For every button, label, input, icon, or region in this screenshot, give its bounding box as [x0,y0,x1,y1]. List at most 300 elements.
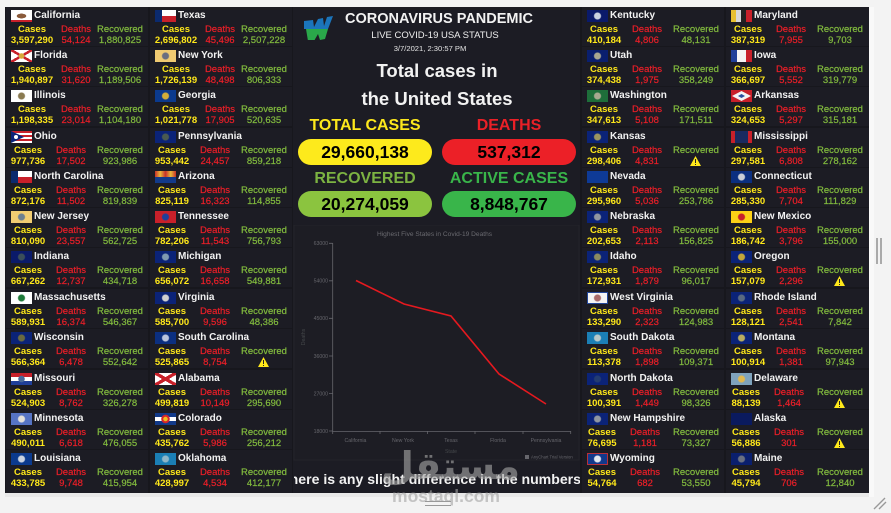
card: Montana: 1,381 [779,357,803,368]
card: Missouri: Missouri [34,373,75,384]
card: New York: Deaths [205,64,235,75]
card: Louisiana: 9,748 [59,478,83,489]
card: North Carolina: 11,502 [57,196,85,207]
card: North Carolina: Cases [14,185,42,196]
card: Pennsylvania [150,128,292,167]
card: Montana: 100,914 [731,357,765,368]
card: California: Cases [18,24,46,35]
card: North Dakota: Recovered [673,387,719,398]
card: Wyoming: Cases [588,467,616,478]
card: Texas: Texas [178,10,206,21]
card: Ohio: Cases [14,145,42,156]
card: Nebraska: 2,113 [635,236,659,247]
card: New Jersey: 23,557 [56,236,86,247]
card: Tennessee: 11,543 [201,236,229,247]
card: Kentucky [582,7,724,46]
card: Massachusetts: 589,931 [11,317,45,328]
card: Pennsylvania: Recovered [241,145,287,156]
card: Arkansas [726,87,869,126]
card: Oregon: Recovered [817,265,863,276]
card: Florida: Florida [34,50,67,61]
card: Maryland: Deaths [776,24,806,35]
card: Oklahoma: Oklahoma [178,453,226,464]
card: Minnesota: Recovered [97,427,143,438]
card: Maine [726,450,869,493]
card: New York: 48,498 [205,75,235,86]
card: New Hampshire: 73,327 [681,438,711,449]
card: West Virginia: Cases [590,306,618,317]
card: Kentucky: Cases [590,24,618,35]
card: Colorado: Colorado [178,413,222,424]
card: Nevada [582,168,724,207]
card: Arizona: Arizona [178,171,215,182]
card: New Jersey: 562,725 [103,236,137,247]
recovered value [298,191,432,217]
card: New Jersey: Deaths [56,225,86,236]
card: South Dakota: 1,898 [635,357,659,368]
card: Connecticut [726,168,869,207]
card: North Dakota: 1,449 [635,398,659,409]
card: Utah: Utah [610,50,632,61]
card: Indiana: Deaths [56,265,86,276]
card: Wyoming: Wyoming [610,453,655,464]
card: Washington: 5,108 [635,115,659,126]
card: Rhode Island: Recovered [817,306,863,317]
card: Delaware [726,370,869,409]
card: South Dakota: Recovered [673,346,719,357]
card: New York: Cases [162,64,190,75]
card: Nevada: 5,036 [635,196,659,207]
card: Iowa: Cases [734,64,762,75]
card: Wisconsin: Recovered [97,346,143,357]
card: Connecticut: 111,829 [824,196,856,207]
card: Arkansas: 315,181 [823,115,857,126]
card: Idaho: Cases [590,265,618,276]
card: California: Deaths [61,24,91,35]
title: CORONAVIRUS PANDEMIC [345,11,533,27]
card: Georgia: Cases [162,104,190,115]
card: Florida: Deaths [61,64,91,75]
card: Utah: 1,975 [635,75,659,86]
card: Pennsylvania: 24,457 [200,156,230,167]
card: Texas: Deaths [205,24,235,35]
card: North Dakota: Cases [590,387,618,398]
card: Illinois: 1,198,335 [11,115,53,126]
card: New Mexico: 3,796 [779,236,803,247]
card: Kansas: Recovered [673,145,719,156]
card: Tennessee: Recovered [241,225,287,236]
card: Tennessee: Tennessee [178,211,229,222]
card: Alabama [150,370,292,409]
card: Colorado: Deaths [200,427,230,438]
card: New Mexico: 155,000 [823,236,857,247]
card: Mississippi: Deaths [776,145,806,156]
card: Oregon: Oregon [754,251,790,262]
card: Mississippi: Recovered [817,145,863,156]
card: Georgia: 17,905 [205,115,235,126]
card: Pennsylvania: 953,442 [155,156,189,167]
line chart: highest five states in deaths: 36000 [314,354,328,360]
card: Georgia: 520,635 [247,115,281,126]
card: North Carolina: Recovered [97,185,143,196]
card: Alaska [726,410,869,449]
card: Tennessee: Cases [158,225,186,236]
card: Alaska: Deaths [774,427,804,438]
card: Maine: Deaths [774,467,804,478]
card: Nevada: Nevada [610,171,646,182]
card: Montana: Recovered [817,346,863,357]
card: Ohio: Deaths [56,145,86,156]
card: Arizona: Recovered [241,185,287,196]
line chart: highest five states in deaths: Florida [490,438,506,444]
card: New Mexico: New Mexico [754,211,811,222]
card: Colorado: 256,212 [247,438,281,449]
card: California: California [34,10,80,21]
card: Missouri: Deaths [56,387,86,398]
card: Alaska: Recovered [817,427,863,438]
card: Alabama: 295,690 [247,398,281,409]
active cases label: ACTIVE CASES [450,170,568,187]
card: New Mexico: Recovered [817,225,863,236]
card: Washington: Washington [610,90,667,101]
card: Alabama: Recovered [241,387,287,398]
card: Oklahoma: Recovered [241,467,287,478]
card: Delaware: Delaware [754,373,798,384]
card: New Hampshire: 1,181 [633,438,657,449]
card: Utah [582,47,724,86]
card: Ohio [6,128,148,167]
card: Kansas: 298,406 [587,156,621,167]
card: Alabama: Deaths [200,387,230,398]
card: Illinois [6,87,148,126]
card: California: 1,880,825 [99,35,141,46]
card: New Mexico [726,208,869,247]
card: Kentucky: Deaths [632,24,662,35]
card: Alaska: Alaska [754,413,786,424]
card: Massachusetts: Cases [14,306,42,317]
card: Ohio: 977,736 [11,156,45,167]
card: Louisiana: Cases [14,467,42,478]
card: Georgia [150,87,292,126]
card: Kansas: Cases [590,145,618,156]
card: Arkansas: Cases [734,104,762,115]
icon: W logo [304,16,333,40]
card: Arizona: Deaths [200,185,230,196]
subtitle: LIVE COVID-19 USA STATUS [371,30,499,41]
watermark: mostaql: مستقل [381,444,520,488]
card: Florida: 31,620 [61,75,91,86]
card: Iowa [726,47,869,86]
card: Pennsylvania: Deaths [200,145,230,156]
card: Maryland: 387,319 [731,35,765,46]
card: West Virginia [582,289,724,328]
card: Arkansas: 324,653 [731,115,765,126]
card: Illinois: Recovered [97,104,143,115]
card: Maryland: 7,955 [779,35,803,46]
card: Utah: Cases [590,64,618,75]
card: Indiana: 667,262 [11,276,45,287]
card: Iowa: 5,552 [779,75,803,86]
card: Missouri: Recovered [97,387,143,398]
card: New York: Recovered [241,64,287,75]
card: Illinois: 1,104,180 [99,115,141,126]
total cases value: 29,660,138 [321,142,409,162]
card: Texas: 2,507,228 [243,35,285,46]
card: Georgia: Georgia [178,90,216,101]
watermark: mostaql: mostaql.com [392,486,500,506]
card: Wisconsin: Cases [14,346,42,357]
card: Washington: Recovered [673,104,719,115]
card: Mississippi: 278,162 [823,156,857,167]
card: New Jersey: Cases [14,225,42,236]
card: Utah: Recovered [673,64,719,75]
card: Virginia: Recovered [241,306,287,317]
line chart: highest five states in deaths: Texas [444,438,458,444]
card: Nebraska [582,208,724,247]
card: Maryland [726,7,869,46]
card: Massachusetts [6,289,148,328]
card: Arizona: Cases [158,185,186,196]
card: Iowa: 366,697 [731,75,765,86]
heading [361,60,513,109]
card: Oklahoma [150,450,292,493]
card: Florida: 1,940,897 [11,75,53,86]
card: West Virginia: Recovered [673,306,719,317]
card: Wyoming: Recovered [673,467,719,478]
card: New York [150,47,292,86]
card: Nebraska: 202,653 [587,236,621,247]
card: Michigan: Deaths [200,265,230,276]
card: South Carolina: 8,754 [203,357,227,368]
card: Ohio: Ohio [34,131,57,142]
card: South Carolina [150,329,292,368]
recovered label: RECOVERED [314,170,416,187]
active cases value [442,191,576,217]
card: Mississippi: 6,808 [779,156,803,167]
card: Washington: Cases [590,104,618,115]
card: Colorado: 5,986 [203,438,227,449]
card: New Hampshire: Recovered [673,427,719,438]
card: North Dakota: North Dakota [610,373,673,384]
card: Alabama: Cases [158,387,186,398]
card: Minnesota [6,410,148,449]
card: New Mexico: Cases [734,225,762,236]
card: Alabama: Alabama [178,373,220,384]
card: New Hampshire: New Hampshire [610,413,685,424]
card: Virginia: 9,596 [203,317,227,328]
card: Montana: Cases [734,346,762,357]
card: Washington: 347,613 [587,115,621,126]
card: New Jersey: Recovered [97,225,143,236]
card: Nebraska: Deaths [632,225,662,236]
card: New York: New York [178,50,223,61]
marquee note: here is any slight difference in the numbers [294,471,580,487]
card: Oregon: Cases [734,265,762,276]
line chart: highest five states in deaths: 63000 [314,241,328,247]
card: South Carolina: South Carolina [178,332,249,343]
card: Wisconsin: 566,364 [11,357,45,368]
card: Colorado: Cases [158,427,186,438]
icon: right resize grip [876,238,882,264]
line chart: highest five states in deaths: AnyChart Trial Version [531,454,573,460]
card: Illinois: 23,014 [61,115,91,126]
card: Washington [582,87,724,126]
card: Kansas [582,128,724,167]
card: Arizona: 16,323 [200,196,230,207]
card: Oregon [726,248,869,287]
card: Montana: Montana [754,332,795,343]
card: Michigan: 656,072 [155,276,189,287]
card: Tennessee: 756,793 [247,236,281,247]
card: Georgia: Recovered [241,104,287,115]
card: North Carolina [6,168,148,207]
card: California [6,7,148,46]
card: Indiana: Indiana [34,251,69,262]
card: Delaware: 88,139 [731,398,761,409]
card: South Dakota: 109,371 [679,357,713,368]
card: Minnesota: 6,618 [59,438,83,449]
card: Washington: 171,511 [679,115,713,126]
card: Connecticut: Cases [734,185,762,196]
card: Tennessee: 782,206 [155,236,189,247]
card: Pennsylvania: Pennsylvania [178,131,242,142]
card: Rhode Island: Rhode Island [754,292,817,303]
card: Delaware: Recovered [817,387,863,398]
card: South Dakota: South Dakota [610,332,674,343]
card: Indiana [6,248,148,287]
card: Florida [6,47,148,86]
card: Minnesota: 490,011 [11,438,45,449]
card: Louisiana: Recovered [97,467,143,478]
card: Idaho: Recovered [673,265,719,276]
card: Alaska: 56,886 [731,438,761,449]
card: Mississippi: 297,581 [731,156,765,167]
card: Rhode Island: Cases [734,306,762,317]
card: Connecticut: Connecticut [754,171,812,182]
card: Minnesota: Deaths [56,427,86,438]
card: Tennessee: Deaths [200,225,230,236]
card: Louisiana: Louisiana [34,453,81,464]
card: New York: 806,333 [247,75,281,86]
card: Nebraska: Cases [590,225,618,236]
card: Georgia: Deaths [205,104,235,115]
card: Arkansas: Arkansas [754,90,799,101]
card: Virginia: Cases [158,306,186,317]
card: Kentucky: Kentucky [610,10,655,21]
card: Nebraska: Recovered [673,225,719,236]
card: Maine: Cases [732,467,760,478]
card: Iowa: Recovered [817,64,863,75]
card: Oregon: 157,079 [731,276,765,287]
card: Montana: 97,943 [825,357,855,368]
card: Louisiana: 415,954 [103,478,137,489]
line chart: highest five states in deaths: 45000 [314,316,328,322]
card: Arkansas: Deaths [776,104,806,115]
recovered value: 20,274,059 [321,194,409,214]
card: Idaho: Deaths [632,265,662,276]
card: Wisconsin: Deaths [56,346,86,357]
card: Arizona: 114,855 [247,196,281,207]
heading: Total cases in [377,60,497,81]
card: Louisiana: Deaths [56,467,86,478]
card: Tennessee [150,208,292,247]
card: Kansas: Deaths [632,145,662,156]
card: South Carolina: Deaths [200,346,230,357]
card: Nevada: Cases [590,185,618,196]
card: Idaho: 172,931 [587,276,621,287]
card: Minnesota: Minnesota [34,413,83,424]
card: Rhode Island [726,289,869,328]
card: Georgia: 1,021,778 [155,115,197,126]
card: Massachusetts: 16,374 [56,317,86,328]
card: Connecticut: Deaths [776,185,806,196]
line chart: highest five states in deaths: 54000 [314,278,328,284]
card: Missouri: Cases [14,387,42,398]
card: West Virginia: 2,323 [635,317,659,328]
card: Maryland: Cases [734,24,762,35]
card: Colorado: 435,762 [155,438,189,449]
card: Louisiana: 433,785 [11,478,45,489]
card: Delaware: Cases [732,387,760,398]
card: New York: 1,726,139 [155,75,197,86]
line chart: highest five states in deaths: State [445,449,457,455]
card: Maine: Maine [754,453,782,464]
card: Missouri: 8,762 [59,398,83,409]
active cases value: 8,848,767 [470,194,548,214]
card: Virginia: 48,386 [249,317,279,328]
card: Louisiana [6,450,148,493]
card: South Dakota: Cases [590,346,618,357]
card: Idaho: Idaho [610,251,637,262]
card: Oklahoma: 412,177 [247,478,281,489]
card: Nevada: Recovered [673,185,719,196]
card: Utah: 374,438 [587,75,621,86]
card: California: 3,597,290 [11,35,53,46]
card: Nebraska: Nebraska [610,211,655,222]
card: Oklahoma: 428,997 [155,478,189,489]
card: Virginia [150,289,292,328]
card: Rhode Island: 128,121 [731,317,765,328]
card: Kansas: Kansas [610,131,646,142]
card: Maine: 706 [781,478,797,489]
card: Oregon: Deaths [776,265,806,276]
card: North Dakota: 100,391 [587,398,621,409]
card: Nevada: Deaths [632,185,662,196]
card: Wisconsin [6,329,148,368]
card: Florida: Recovered [97,64,143,75]
line chart: highest five states in deaths: 18000 [314,429,328,435]
card: Wisconsin: 6,478 [59,357,83,368]
card: Colorado [150,410,292,449]
card: Rhode Island: 2,541 [779,317,803,328]
card: Kentucky: 4,806 [635,35,659,46]
card: Maryland: Recovered [817,24,863,35]
line chart: highest five states in deaths: Pennsylvania [531,438,562,444]
card: North Carolina: 819,839 [103,196,137,207]
card: Maine: Recovered [817,467,863,478]
card: Utah: 358,249 [679,75,713,86]
card: Wyoming: 682 [637,478,653,489]
card: Michigan: 16,658 [200,276,230,287]
card: Connecticut: 285,330 [731,196,765,207]
card: New Hampshire: Deaths [630,427,660,438]
card: Oregon: 2,296 [779,276,803,287]
card: Massachusetts: Massachusetts [34,292,106,303]
card: Ohio: Recovered [97,145,143,156]
card: South Carolina: Cases [158,346,186,357]
card: Michigan: Michigan [178,251,221,262]
card: New Hampshire [582,410,724,449]
